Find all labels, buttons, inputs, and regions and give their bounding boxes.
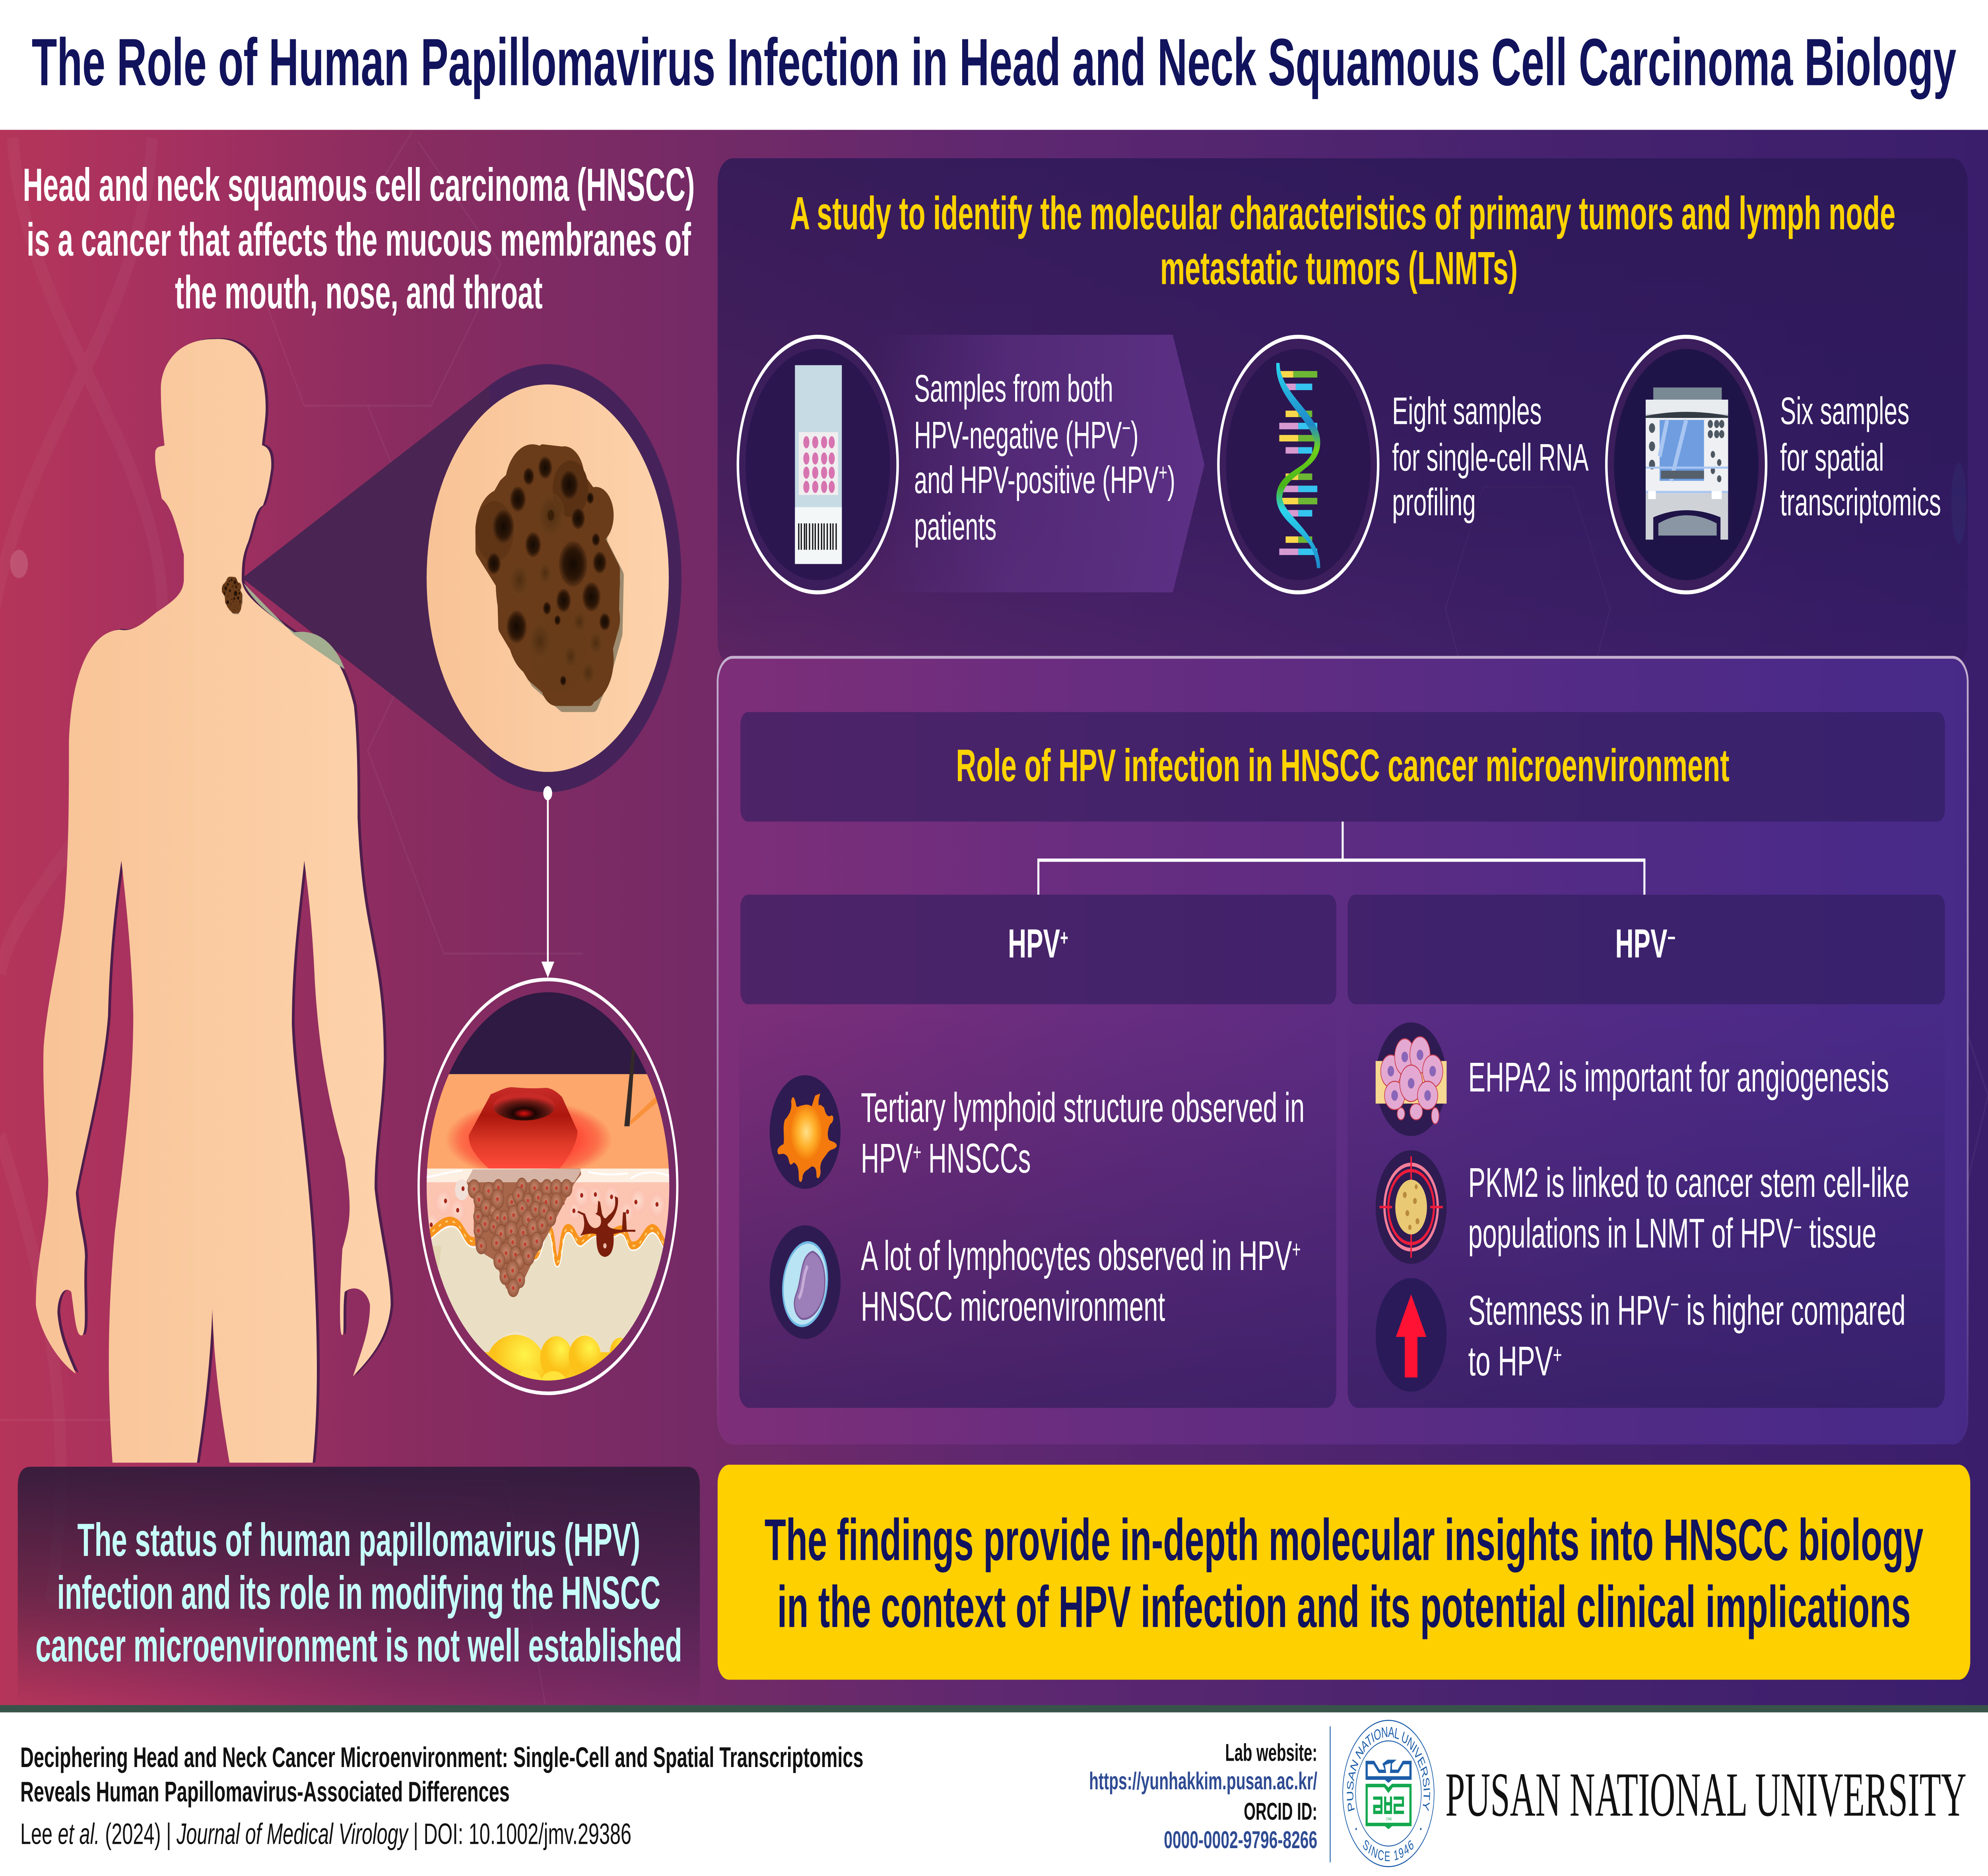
HPV negative header [1348, 895, 1945, 1004]
intro heading: what is HNSCC: Head and neck squamous cell carcinoma (HNSCC) [23, 158, 695, 211]
stemness text: to HPV [1468, 1338, 1551, 1385]
paper citation [20, 1741, 864, 1851]
lab website and ORCID: 0000-0002-9796-8266 [1164, 1826, 1317, 1853]
PKM2 text: PKM2 is linked to cancer stem cell-like [1468, 1160, 1909, 1206]
logo: Pusan National University seal: SINCE 1946 [1361, 1837, 1415, 1864]
status text: infection and its role in modifying the HNSCC [57, 1566, 660, 1619]
PKM2 text: tissue [1802, 1210, 1876, 1256]
icon: sequencing machine [1606, 337, 1766, 592]
samples text: HPV-negative (HPV [914, 414, 1126, 457]
zoom cone and magnified circle backdrop [242, 364, 681, 792]
stemness text: Stemness in HPV [1468, 1288, 1672, 1334]
study heading: A study to identify the molecular characteristics of primary tumors and lymph node [790, 187, 1895, 239]
stemness text: − [1670, 1291, 1679, 1318]
tertiary lymphoid text: + [913, 1138, 921, 1166]
role heading bar [740, 712, 1945, 821]
tertiary lymphoid text: HNSCCs [921, 1135, 1031, 1182]
tertiary lymphoid text [861, 1085, 1305, 1182]
icon: DNA helix [1218, 337, 1378, 592]
lab website and ORCID: ORCID ID: [1244, 1798, 1317, 1825]
panel: HPV positive findings [739, 1010, 1336, 1408]
arrow from tumor to skin cross-section [542, 786, 554, 978]
conclusion callout [718, 1465, 1970, 1680]
single-cell text: Eight samples [1392, 390, 1542, 433]
panel: study design [718, 158, 1968, 665]
paper citation: Deciphering Head and Neck Cancer Microenvironment: Single-Cell and Spatial Transcriptomics [20, 1741, 864, 1773]
status text: The status of human papillomavirus (HPV) [78, 1513, 640, 1566]
samples text: Samples from both [914, 367, 1113, 410]
status text [35, 1513, 682, 1672]
panel: role of HPV infection [718, 657, 1968, 1445]
connector lines [1039, 821, 1644, 895]
spatial text: Six samples [1780, 390, 1909, 433]
role heading bar: Role of HPV infection in HNSCC cancer microenvironment [956, 740, 1729, 791]
paper citation: Lee et al. (2024) | Journal of Medical Virology | DOI: 10.1002/jmv.29386 [20, 1818, 631, 1851]
human body silhouette [36, 338, 393, 1464]
samples text: and HPV-positive (HPV [914, 458, 1163, 501]
single-cell text: for single-cell RNA [1392, 436, 1589, 479]
single-cell text: profiling [1392, 481, 1476, 524]
arrow chevron behind samples text [875, 335, 1204, 592]
paper citation: Reveals Human Papillomavirus-Associated Differences [20, 1776, 510, 1808]
EHPA2 text: EHPA2 is important for angiogenesis [1468, 1054, 1889, 1101]
icon: tissue slide [738, 337, 898, 592]
cancer cell cluster invading the skin [466, 1169, 581, 1297]
spatial text: transcriptomics [1780, 481, 1941, 524]
intro heading: what is HNSCC [23, 158, 695, 318]
icon: angiogenesis cell cluster [1376, 1022, 1446, 1136]
magnified tumor circle [427, 385, 669, 772]
study heading: metastatic tumors (LNMTs) [1160, 242, 1518, 294]
conclusion callout: in the context of HPV infection and its potential clinical implications [777, 1574, 1910, 1640]
stemness text [1468, 1288, 1906, 1385]
samples text: − [1122, 414, 1131, 441]
stemness text: is higher compared [1679, 1288, 1906, 1334]
spatial text: for spatial [1780, 436, 1884, 479]
panel: status of HPV statement [18, 1467, 700, 1704]
icon: orange immune cell [770, 1075, 841, 1189]
panel: HPV negative findings [1348, 1010, 1945, 1408]
lymphocytes text: + [1292, 1236, 1301, 1263]
spatial text [1780, 390, 1941, 524]
logo: Pusan National University seal [1343, 1721, 1434, 1866]
samples text [914, 367, 1175, 548]
conclusion callout: The findings provide in-depth molecular insights into HNSCC biology [765, 1507, 1923, 1573]
HPV positive header: + [1060, 925, 1068, 950]
HPV positive header: HPV [1008, 921, 1060, 967]
lymphocytes text [861, 1233, 1301, 1330]
logo: Pusan National University seal: PUSAN NATIONAL UNIVERSITY [1345, 1724, 1432, 1814]
footer band [0, 1705, 1988, 1876]
PKM2 text [1468, 1160, 1909, 1256]
samples text: patients [914, 505, 996, 548]
tumor on the neck [222, 577, 242, 613]
skin cross-section circle [417, 979, 683, 1410]
tertiary lymphoid text: HPV [861, 1135, 914, 1182]
samples text: ) [1167, 458, 1175, 501]
logo: Pusan National University seal: 1946 [1386, 1817, 1392, 1822]
intro heading: what is HNSCC: is a cancer that affects the mucous membranes of [27, 213, 691, 266]
icon: red up arrow [1376, 1278, 1446, 1392]
PKM2 text: populations in LNMT of HPV [1468, 1210, 1796, 1256]
lymphocytes text: HNSCC microenvironment [861, 1284, 1165, 1330]
single-cell text [1392, 390, 1589, 524]
study heading [790, 187, 1895, 294]
lab website and ORCID [1089, 1739, 1317, 1853]
intro heading: what is HNSCC: the mouth, nose, and throat [175, 266, 543, 318]
icon: targeted cancer cell [1376, 1150, 1446, 1264]
icon: lymphocyte [770, 1225, 841, 1339]
HPV positive header [740, 895, 1336, 1004]
lab website and ORCID: https://yunhakkim.pusan.ac.kr/ [1089, 1767, 1317, 1794]
tertiary lymphoid text: Tertiary lymphoid structure observed in [861, 1085, 1305, 1131]
HPV negative header: − [1668, 925, 1675, 950]
title: The Role of Human Papillomavirus Infection in Head and Neck Squamous Cell Carcinoma Biology [32, 25, 1956, 99]
stemness text: + [1553, 1341, 1562, 1369]
samples text: + [1159, 459, 1167, 486]
status text: cancer microenvironment is not well established [35, 1619, 682, 1672]
HPV negative header: HPV [1615, 921, 1668, 967]
PKM2 text: − [1793, 1214, 1802, 1241]
title bar [0, 0, 1988, 130]
samples text: ) [1131, 414, 1139, 457]
lab website and ORCID: Lab website: [1225, 1739, 1317, 1766]
lymphocytes text: A lot of lymphocytes observed in HPV [861, 1233, 1294, 1279]
